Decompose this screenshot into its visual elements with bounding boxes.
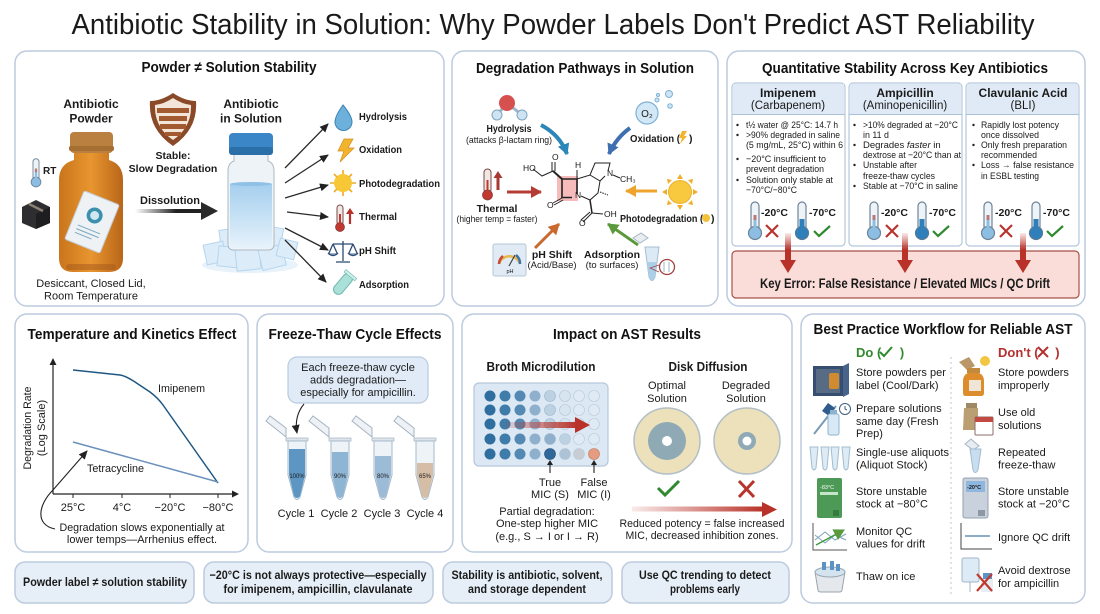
card: imipenem: -70°C xyxy=(809,207,836,219)
chart: degradation rate vs temperature xyxy=(22,358,239,514)
arrow: adsorption xyxy=(608,224,638,245)
card: clavulanic acid: (BLI) xyxy=(1011,100,1036,112)
icon: thermal thermometer xyxy=(482,169,502,200)
icon: optimal disk xyxy=(634,408,700,474)
card: ampicillin: >10% degraded at −20°C xyxy=(863,120,958,131)
text: store at -80: stock at −80°C xyxy=(856,498,928,510)
arrow: annotation to curve xyxy=(41,451,87,529)
card: ampicillin: Ampicillin xyxy=(876,86,934,100)
icon: tube cycle 1: 100% xyxy=(289,474,305,480)
pill: QC trending xyxy=(622,562,789,603)
card: ampicillin: Stable at −70°C in saline xyxy=(863,181,958,192)
sublabel: adsorption: (to surfaces) xyxy=(586,260,638,271)
arrow: callout to tube xyxy=(296,404,304,433)
label: optimal solution: Solution xyxy=(647,393,687,405)
card: ampicillin: -70°C xyxy=(929,207,956,219)
arrows: to key error xyxy=(780,233,1031,273)
caption: Arrhenius note: Degradation slows exponentially at xyxy=(60,522,224,534)
pill: stability dependence xyxy=(443,562,612,603)
icon: pH gauge xyxy=(493,244,526,276)
arrow: oxidation xyxy=(609,128,630,154)
text: repeated freeze-thaw: Repeated xyxy=(998,447,1046,459)
icon: check xyxy=(658,481,679,495)
callout: freeze-thaw note: Each freeze-thaw cycle xyxy=(301,362,415,374)
chart: degradation rate vs temperature: 4°C xyxy=(113,502,131,514)
text: prepare solutions: same day (Fresh xyxy=(856,416,939,428)
label: antibiotic in solution: in Solution xyxy=(220,112,282,126)
labels: cycles: Cycle 1 xyxy=(278,508,314,520)
card: imipenem: −70°C/−80°C xyxy=(746,185,797,196)
icon: oxygen bubble xyxy=(636,90,672,124)
text: old solutions: Use old xyxy=(998,407,1035,419)
label: photodegradation: ) xyxy=(711,213,714,225)
text: avoid dextrose: for ampicillin xyxy=(998,578,1059,590)
labels: degradation routes: Thermal xyxy=(359,211,397,223)
icon: tube cycle 2 xyxy=(309,416,351,500)
chart: beta-lactam molecule: N xyxy=(607,168,613,178)
label: stable slow degradation: Stable: xyxy=(155,150,191,162)
icon: storage cabinet xyxy=(813,363,849,397)
arrow: hydrolysis xyxy=(541,125,567,154)
panel: best practice workflow xyxy=(801,314,1085,603)
card: imipenem: (Carbapenem) xyxy=(751,100,825,112)
label: RT: RT xyxy=(43,166,56,177)
icon: oxidation bolt xyxy=(338,139,354,162)
label: degraded solution: Degraded xyxy=(722,380,770,392)
card: imipenem: Solution only stable at xyxy=(746,175,833,186)
chart: beta-lactam molecule: N xyxy=(575,190,581,200)
card: imipenem: t½ water @ 25°C: 14.7 h xyxy=(746,120,838,131)
label: antibiotic powder: Powder xyxy=(69,112,113,126)
chart: beta-lactam molecule: OH xyxy=(604,209,617,219)
card: clavulanic acid: Clavulanic Acid xyxy=(979,86,1067,100)
text: monitor QC: Monitor QC xyxy=(856,526,912,538)
caption: powder storage: Room Temperature xyxy=(44,290,138,302)
icon: cross xyxy=(739,481,754,497)
text: store improperly: Store powders xyxy=(998,367,1069,379)
card: clavulanic acid: Loss → false resistance xyxy=(981,160,1074,171)
chart: degradation rate vs temperature: −20°C xyxy=(154,502,186,514)
pill: stability dependence: and storage dependent xyxy=(468,582,586,596)
caption: partial degradation: One-step higher MIC xyxy=(496,518,598,530)
sublabel: hydrolysis: (attacks β-lactam ring) xyxy=(466,135,552,146)
card: ampicillin: dextrose at −20°C than at xyxy=(863,150,961,161)
icon: tube cycle 3 xyxy=(352,416,394,500)
icon: tube cycle 3: 80% xyxy=(377,474,390,480)
labels: degradation routes: Photodegradation xyxy=(359,178,440,190)
label: thermal: Thermal xyxy=(477,203,517,215)
card: clavulanic acid: -20°C xyxy=(995,207,1022,219)
sublabel: thermal: (higher temp = faster) xyxy=(456,214,538,225)
card: ampicillin: Degrades faster in xyxy=(863,140,941,151)
arrow: thermal xyxy=(507,190,541,194)
card: imipenem: −20°C insufficient to xyxy=(746,154,826,165)
pill: QC trending: Use QC trending to detect xyxy=(639,568,771,582)
text: monitor QC: values for drift xyxy=(856,538,925,550)
card: ampicillin: in 11 d xyxy=(863,130,889,141)
text: aliquots: Single-use aliquots xyxy=(856,447,949,459)
card: imipenem: >90% degraded in saline xyxy=(746,130,840,141)
text: store at -80: Store unstable xyxy=(856,486,927,498)
labels: degradation routes xyxy=(359,111,440,291)
icon: solution vial xyxy=(228,133,274,250)
arrows: degradation routes xyxy=(285,124,328,282)
icon: aliquot tubes xyxy=(810,447,850,470)
chart: degradation rate vs temperature: Tetracycline xyxy=(87,463,144,475)
pill: stability dependence: Stability is antibiotic, solvent, xyxy=(452,568,602,582)
icon: hydrolysis drop xyxy=(335,105,352,130)
label: false MIC: MIC (I) xyxy=(577,489,611,501)
arrow: dissolution xyxy=(135,202,218,220)
chart: beta-lactam molecule xyxy=(523,152,636,228)
card: clavulanic acid: -70°C xyxy=(1043,207,1070,219)
labels: degradation routes: Adsorption xyxy=(359,279,409,291)
text: aliquots: (Aliquot Stock) xyxy=(856,460,928,472)
icon: don't cross xyxy=(1038,347,1048,357)
text: store powders: label (Cool/Dark) xyxy=(856,380,939,392)
icon: oxygen bubble: O₂ xyxy=(641,109,653,120)
icon: room temperature thermometer xyxy=(31,159,41,187)
text: store powders: Store powders per xyxy=(856,367,946,379)
icon: tube cycle 4 xyxy=(394,416,436,500)
icon: bottle in light xyxy=(959,356,990,396)
text: avoid dextrose: Avoid dextrose xyxy=(998,565,1071,577)
card: clavulanic acid: once dissolved xyxy=(981,130,1039,141)
arrow: reduced potency xyxy=(632,502,777,517)
icon: tube cycle 2: 90% xyxy=(334,474,347,480)
icon: do check xyxy=(880,347,892,356)
icon: pH scale xyxy=(328,241,358,262)
label: oxidation: Oxidation ( xyxy=(630,133,680,145)
label: optimal solution: Optimal xyxy=(648,380,686,392)
labels: cycles: Cycle 3 xyxy=(364,508,400,520)
card: clavulanic acid: recommended xyxy=(981,150,1037,161)
heading: temperature and kinetics: Temperature and Kinetics Effect xyxy=(28,326,236,343)
chart: beta-lactam molecule: O xyxy=(552,152,559,162)
callout: freeze-thaw note: adds degradation— xyxy=(310,374,406,386)
label: degraded solution: Solution xyxy=(726,393,766,405)
caption: reduced potency: MIC, decreased inhibition zones. xyxy=(626,530,778,542)
arrows: MIC pointers xyxy=(547,460,597,473)
icon: photodegradation sun xyxy=(330,170,356,196)
labels: cycles xyxy=(278,508,443,520)
arrow: photodegradation xyxy=(626,190,657,192)
label: pH shift: pH Shift xyxy=(532,249,573,261)
text: repeated freeze-thaw: freeze-thaw xyxy=(998,460,1056,472)
pill: -20C not protective xyxy=(204,562,433,603)
icon: green freezer xyxy=(817,478,842,518)
callout: freeze-thaw note: especially for ampicillin. xyxy=(300,387,416,399)
text: prepare solutions: Prepare solutions xyxy=(856,403,942,415)
pill: -20C not protective: −20°C is not always protective—especially xyxy=(210,568,427,582)
label: false MIC: False xyxy=(581,477,607,489)
card: ampicillin: freeze-thaw cycles xyxy=(863,171,935,182)
chart: beta-lactam molecule: O xyxy=(547,200,554,210)
icon: water molecule xyxy=(492,95,527,120)
callout: key error xyxy=(732,251,1079,298)
icon: ice cubes xyxy=(202,225,298,273)
caption: partial degradation: (e.g., S → I or I → R) xyxy=(495,531,599,543)
heading: impact on AST: Impact on AST Results xyxy=(553,326,701,343)
card: clavulanic acid: Only fresh preparation xyxy=(981,140,1067,151)
label: antibiotic powder: Antibiotic xyxy=(63,97,119,111)
label: stable slow degradation: Slow Degradation xyxy=(129,163,217,175)
label: adsorption: Adsorption xyxy=(584,249,640,261)
icon: green freezer: -83°C xyxy=(820,485,834,491)
chart: degradation rate vs temperature: Imipenem xyxy=(158,383,205,395)
arrow: pH shift xyxy=(535,224,559,248)
icon: single tube xyxy=(965,439,981,472)
card: imipenem xyxy=(732,83,845,246)
chart: degradation rate vs temperature: −80°C xyxy=(202,502,234,514)
card: imipenem: -20°C xyxy=(761,207,788,219)
sublabel: pH shift: (Acid/Base) xyxy=(527,260,577,271)
caption: reduced potency: Reduced potency = false increased xyxy=(620,518,784,530)
labels: degradation routes: pH Shift xyxy=(359,245,396,257)
label: antibiotic in solution: Antibiotic xyxy=(223,97,279,111)
label: hydrolysis: Hydrolysis xyxy=(486,123,532,135)
card: ampicillin: Unstable after xyxy=(863,160,917,171)
icon: sun xyxy=(662,174,698,210)
pill: powder label: Powder label ≠ solution stability xyxy=(23,575,187,589)
text: thaw on ice: Thaw on ice xyxy=(856,571,915,583)
pill: -20C not protective: for imipenem, ampicillin, clavulanate xyxy=(224,582,413,596)
chart: beta-lactam molecule: HO xyxy=(523,163,536,173)
icon: thermal thermometer xyxy=(336,205,354,232)
caption: partial degradation: Partial degradation: xyxy=(499,506,595,518)
panel: quantitative stability xyxy=(727,51,1085,306)
card: clavulanic acid xyxy=(966,83,1079,246)
card: clavulanic acid: Rapidly lost potency xyxy=(981,120,1059,131)
icon: brick shield xyxy=(150,93,196,146)
panel: degradation pathways xyxy=(452,51,718,306)
icon: degraded disk xyxy=(714,408,780,474)
callout: freeze-thaw note xyxy=(288,357,428,403)
text: store at -20: stock at −20°C xyxy=(998,498,1070,510)
icon: pipette and clock xyxy=(814,403,850,435)
panel: freeze-thaw xyxy=(257,314,453,552)
chart: degradation rate vs temperature: 25°C xyxy=(61,502,85,514)
icon: flat chart xyxy=(961,523,992,549)
labels: degradation routes: Hydrolysis xyxy=(359,111,407,123)
icon: pH gauge: pH xyxy=(506,269,514,275)
icon: grey freezer: -20°C xyxy=(967,485,981,491)
chart: beta-lactam molecule: O xyxy=(579,218,586,228)
labels: cycles: Cycle 4 xyxy=(407,508,443,520)
heading: best practice: Best Practice Workflow for Reliable AST xyxy=(814,321,1072,338)
label: oxidation: ) xyxy=(689,133,692,145)
subheading: disk diffusion: Disk Diffusion xyxy=(668,360,748,374)
card: imipenem: (5 mg/mL, 25°C) within 6 xyxy=(746,140,843,151)
pill: QC trending: problems early xyxy=(670,582,740,596)
caption: Arrhenius note: lower temps—Arrhenius effect. xyxy=(67,534,217,546)
label: photodegradation: Photodegradation ( xyxy=(620,213,703,225)
chart: beta-lactam molecule: H xyxy=(575,160,581,170)
heading: powder vs solution: Powder ≠ Solution Stability xyxy=(142,59,317,76)
heading: degradation pathways: Degradation Pathways in Solution xyxy=(476,60,694,77)
subheading: do: Do ( ) xyxy=(856,345,904,360)
card: clavulanic acid: in ESBL testing xyxy=(981,171,1039,182)
icon: dark box xyxy=(22,200,50,229)
chart: degradation rate vs temperature: Degradation Rate xyxy=(22,386,34,470)
icon: tube cycle 1 xyxy=(266,416,308,500)
card: ampicillin: -20°C xyxy=(881,207,908,219)
text: ignore QC drift: Ignore QC drift xyxy=(998,532,1070,544)
icon: tube cycle 4: 65% xyxy=(419,474,432,480)
icon: adsorption tube xyxy=(330,270,357,298)
caption: powder storage: Desiccant, Closed Lid, xyxy=(36,278,146,290)
chart: degradation rate vs temperature: (Log Scale) xyxy=(36,400,48,456)
text: old solutions: solutions xyxy=(998,420,1042,432)
text: store improperly: improperly xyxy=(998,380,1050,392)
subheading: don't: Don't ( ) xyxy=(998,345,1060,360)
heading: quantitative stability: Quantitative Stability Across Key Antibiotics xyxy=(762,60,1048,77)
text: store at -20: Store unstable xyxy=(998,486,1069,498)
panel: impact on AST xyxy=(462,314,792,552)
labels: cycles: Cycle 2 xyxy=(321,508,357,520)
chart: microdilution plate xyxy=(474,383,608,466)
chart: beta-lactam molecule: CH₃ xyxy=(620,174,636,184)
label: dissolution: Dissolution xyxy=(140,195,200,207)
icon: tube with magnifier xyxy=(633,233,674,280)
subheading: broth microdilution: Broth Microdilution xyxy=(486,360,596,374)
icon: old bottle and calendar xyxy=(963,403,993,435)
card: imipenem: Imipenem xyxy=(760,86,816,100)
icon: IV bag with cross xyxy=(962,558,993,592)
card: ampicillin xyxy=(849,83,962,246)
panel: powder vs solution stability xyxy=(15,51,444,306)
label: true MIC: True xyxy=(539,477,561,489)
icon: QC chart xyxy=(813,523,847,550)
panel: temperature and kinetics xyxy=(15,314,248,552)
text: prepare solutions: Prep) xyxy=(856,428,883,440)
title: Antibiotic Stability in Solution: Why Powder Labels Don't Predict AST Reliability xyxy=(72,9,1035,41)
labels: degradation routes: Oxidation xyxy=(359,144,402,156)
icon: ice bucket xyxy=(815,561,845,592)
icon: grey freezer xyxy=(963,478,988,518)
label: true MIC: MIC (S) xyxy=(531,489,569,501)
heading: freeze-thaw: Freeze-Thaw Cycle Effects xyxy=(268,326,442,343)
card: ampicillin: (Aminopenicillin) xyxy=(863,100,947,112)
card: imipenem: prevent degradation xyxy=(746,164,824,175)
icon: amber bottle with desiccant xyxy=(59,132,123,272)
pill: powder label xyxy=(15,562,194,603)
